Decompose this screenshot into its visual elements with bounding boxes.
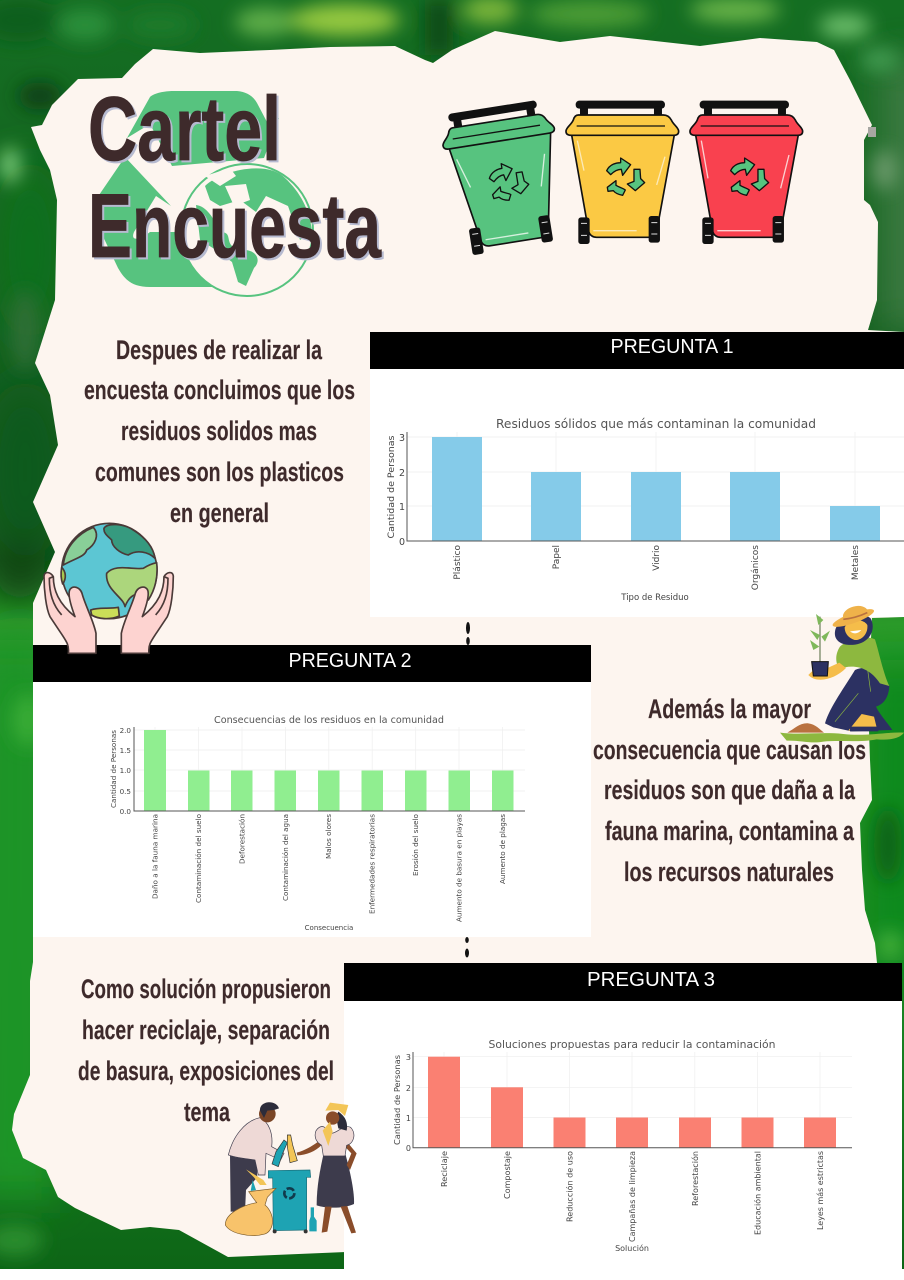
icon: woman planting a tree bbox=[780, 603, 904, 742]
text block: conclusion on residues: comunes son los plasticos bbox=[95, 457, 344, 487]
text block: solutions: hacer reciclaje, separación bbox=[82, 1015, 330, 1045]
bar chart: soluciones: Compostaje bbox=[503, 1151, 512, 1199]
bar chart: consecuencias: Cantidad de Personas bbox=[110, 730, 118, 808]
logo: recycling arrows and globe bbox=[93, 91, 313, 296]
face bbox=[845, 620, 867, 640]
bag bbox=[225, 1188, 276, 1236]
bar chart: soluciones: 2 bbox=[406, 1084, 411, 1093]
icon: green bin bbox=[438, 98, 572, 257]
bar chart: residuos solidos: 3 bbox=[399, 433, 405, 444]
bar chart: consecuencias: Aumento de plagas bbox=[499, 814, 507, 884]
man head bbox=[259, 1106, 276, 1122]
text block: conclusion on residues bbox=[84, 335, 355, 528]
arm bbox=[808, 663, 846, 680]
icon: dotted connector 1 bbox=[466, 622, 470, 645]
torn grey corner bbox=[868, 127, 876, 137]
text block: conclusion on residues: residuos solidos mas bbox=[121, 416, 317, 446]
bar chart: residuos solidos: Tipo de Residuo bbox=[620, 593, 689, 603]
woman head and scarf bbox=[336, 1112, 347, 1131]
man trousers bbox=[230, 1155, 257, 1212]
bar chart: consecuencias: Erosión del suelo bbox=[412, 814, 420, 876]
heading: pregunta 1: PREGUNTA 1 bbox=[610, 336, 734, 358]
woman skirt bbox=[317, 1155, 354, 1208]
bar chart: consecuencias: Contaminación del agua bbox=[282, 814, 290, 901]
heading: pregunta 3: PREGUNTA 3 bbox=[587, 969, 715, 991]
text block: conclusion on residues: encuesta concluimos que los bbox=[84, 375, 355, 405]
title: Encuesta bbox=[90, 178, 384, 279]
bar chart: consecuencias: Aumento de basura en playas bbox=[456, 814, 464, 922]
bar chart: consecuencias: Daño a la fauna marina bbox=[152, 814, 160, 899]
green bottle bbox=[309, 1207, 317, 1231]
panel: pregunta 2 bbox=[33, 645, 591, 937]
woman blouse bbox=[315, 1126, 354, 1156]
text block: solutions: Como solución propusieron bbox=[81, 974, 331, 1004]
icon: red bin bbox=[690, 101, 803, 244]
mound bbox=[787, 723, 824, 733]
hat bbox=[831, 606, 876, 630]
text block: consequences: los recursos naturales bbox=[624, 857, 834, 887]
bar chart: consecuencias: Malos olores bbox=[325, 814, 333, 859]
bar chart: soluciones: Campañas de limpieza bbox=[628, 1151, 637, 1242]
bar chart: soluciones: 0 bbox=[406, 1144, 411, 1153]
ground bbox=[780, 733, 904, 742]
icon: two people recycling bbox=[225, 1102, 357, 1236]
bar chart: soluciones: Reducción de uso bbox=[564, 1151, 574, 1222]
bar chart: consecuencias: 1.5 bbox=[120, 746, 131, 755]
text block: conclusion on residues: en general bbox=[170, 498, 269, 528]
text block: consequences bbox=[593, 694, 866, 887]
bar chart: residuos solidos bbox=[387, 416, 904, 603]
heading: pregunta 2: PREGUNTA 2 bbox=[288, 650, 412, 672]
bin bbox=[268, 1170, 311, 1231]
text block: conclusion on residues: Despues de realizar la bbox=[116, 335, 323, 365]
bar chart: residuos solidos: Residuos sólidos que más contaminan la comunidad bbox=[496, 416, 816, 431]
bar chart: consecuencias: Deforestación bbox=[238, 814, 246, 864]
text block: solutions bbox=[78, 974, 334, 1127]
bar chart: soluciones: Reforestación bbox=[690, 1151, 700, 1206]
strip below photo bbox=[0, 1269, 904, 1280]
plant bbox=[818, 617, 822, 662]
bar chart: residuos solidos: 0 bbox=[399, 537, 405, 548]
bar chart: consecuencias: 0.0 bbox=[120, 807, 131, 816]
bar chart: soluciones: 1 bbox=[406, 1114, 411, 1123]
bottles bbox=[272, 1140, 287, 1167]
bar chart: residuos solidos: Metales bbox=[851, 545, 861, 580]
bar chart: soluciones: Reciclaje bbox=[440, 1151, 449, 1187]
panel: pregunta 3 bbox=[344, 963, 902, 1270]
bar chart: soluciones: Soluciones propuestas para reducir la contaminación bbox=[488, 1038, 776, 1051]
text block: solutions: tema bbox=[184, 1097, 231, 1127]
hair bbox=[835, 614, 873, 645]
bar chart: soluciones: 3 bbox=[406, 1053, 411, 1062]
shirt bbox=[836, 637, 889, 686]
title: Cartel bbox=[88, 79, 281, 180]
title: Cartel bbox=[90, 81, 283, 182]
text block: consequences: Además la mayor bbox=[648, 694, 811, 724]
icon: hands holding earth bbox=[44, 523, 173, 653]
bar chart: consecuencias bbox=[110, 715, 525, 932]
pants bbox=[825, 668, 892, 731]
bar chart: soluciones: Leyes más estrictas bbox=[816, 1151, 825, 1230]
bar chart: consecuencias: Enfermedades respiratorias bbox=[368, 814, 376, 914]
bar chart: consecuencias: Consecuencias de los residuos en la comunidad bbox=[214, 715, 444, 726]
icon: three recycling bins bbox=[438, 98, 803, 257]
panel: pregunta 1 bbox=[370, 332, 904, 617]
bar chart: consecuencias: Contaminación del suelo bbox=[195, 814, 203, 903]
text block: solutions: de basura, exposiciones del bbox=[78, 1056, 334, 1086]
recycle glyph bbox=[284, 1188, 294, 1198]
bar chart: residuos solidos: Cantidad de Personas bbox=[387, 435, 397, 539]
bar chart: residuos solidos: Papel bbox=[552, 545, 562, 569]
bar chart: residuos solidos: Vidrio bbox=[652, 545, 662, 571]
woman legs bbox=[322, 1206, 356, 1233]
bar chart: consecuencias: 2.0 bbox=[120, 726, 131, 735]
bar chart: residuos solidos: Plástico bbox=[453, 545, 463, 580]
bar chart: soluciones: Educación ambiental bbox=[752, 1151, 762, 1235]
bar chart: residuos solidos: 2 bbox=[399, 468, 405, 479]
man shirt bbox=[228, 1118, 284, 1175]
icon: dotted connector 2 bbox=[465, 937, 469, 958]
title bbox=[88, 79, 384, 279]
icon: yellow bin bbox=[566, 101, 679, 244]
bar chart: soluciones: Solución bbox=[615, 1243, 649, 1253]
bar chart: soluciones bbox=[393, 1038, 852, 1253]
bar chart: soluciones: Cantidad de Personas bbox=[393, 1055, 402, 1145]
bar chart: consecuencias: Consecuencia bbox=[305, 924, 353, 932]
title: Encuesta bbox=[88, 176, 382, 277]
bar chart: residuos solidos: 1 bbox=[399, 502, 405, 513]
woman arms bbox=[297, 1142, 357, 1170]
bar chart: residuos solidos: Orgánicos bbox=[751, 545, 761, 590]
bar chart: consecuencias: 0.5 bbox=[120, 787, 131, 796]
bar chart: consecuencias: 1.0 bbox=[120, 766, 131, 775]
